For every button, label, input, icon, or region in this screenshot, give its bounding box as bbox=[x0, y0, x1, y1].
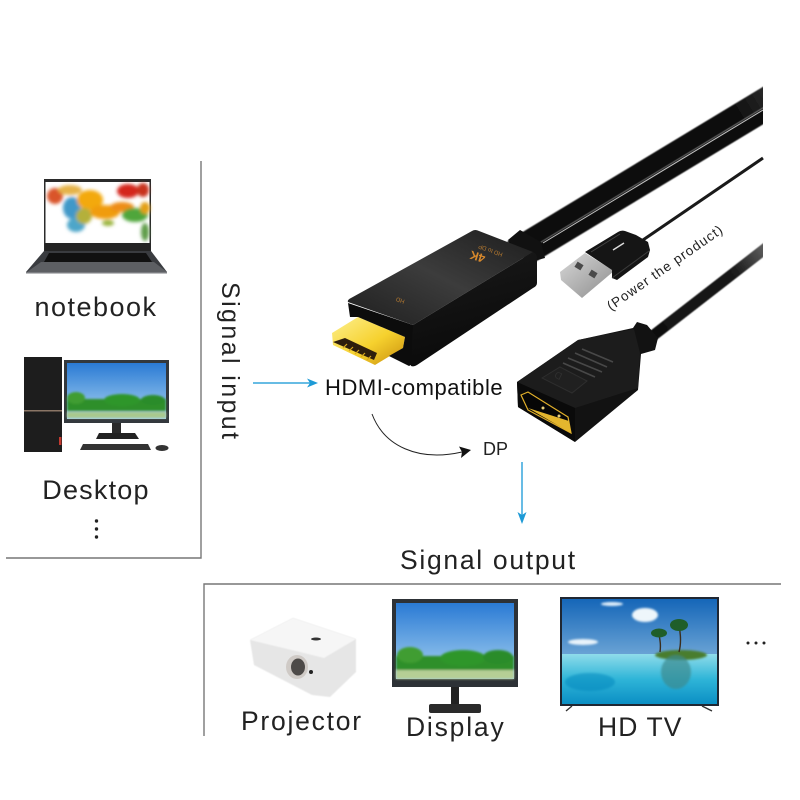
adapter strain relief bbox=[508, 230, 545, 262]
adapter printed HD to DP: HD to DP bbox=[478, 242, 504, 257]
DP cable and female connector bbox=[517, 225, 800, 442]
icon: laptop notebook bbox=[26, 179, 167, 274]
label: notebook: notebook bbox=[34, 292, 158, 322]
icon: desktop computer with monitor bbox=[24, 357, 169, 452]
icon: projector bbox=[250, 618, 356, 697]
adapter front face bbox=[348, 303, 415, 366]
USB power cable and plug bbox=[560, 158, 763, 298]
label: HDMI-compatible: HDMI-compatible bbox=[325, 375, 503, 400]
adapter printed HD: HD bbox=[395, 295, 406, 304]
icon: display monitor bbox=[392, 599, 518, 713]
panel: signal input sources frame bbox=[6, 161, 201, 558]
label: Display: Display bbox=[406, 712, 506, 742]
adapter printed 4K: 4K bbox=[468, 248, 487, 266]
label: power the product: (Power the product) bbox=[604, 222, 726, 313]
arrow: signal input to HDMI bbox=[253, 378, 318, 388]
label: HD TV: HD TV bbox=[598, 712, 683, 742]
main cable pair bbox=[512, 70, 800, 260]
label: Signal input rotated: Signal input bbox=[216, 282, 244, 441]
DP cable and female connector: D bbox=[553, 368, 564, 381]
label: Desktop: Desktop bbox=[42, 475, 150, 505]
gold HDMI plug bbox=[332, 317, 405, 365]
heading: Signal output: Signal output bbox=[400, 545, 577, 575]
icon: horizontal ellipsis bbox=[746, 642, 766, 644]
adapter side face bbox=[411, 252, 537, 366]
arrow: HDMI converts to DP bbox=[372, 414, 471, 458]
product: HDMI cable with adapter bbox=[332, 70, 800, 442]
icon: vertical ellipsis bbox=[95, 519, 98, 539]
arrow: DP to signal output bbox=[518, 462, 526, 524]
panel: signal output devices frame bbox=[204, 584, 781, 742]
label: DP: DP bbox=[483, 439, 508, 459]
label: Projector: Projector bbox=[241, 706, 363, 736]
icon: HD TV bbox=[560, 597, 719, 711]
adapter top face bbox=[348, 230, 533, 325]
